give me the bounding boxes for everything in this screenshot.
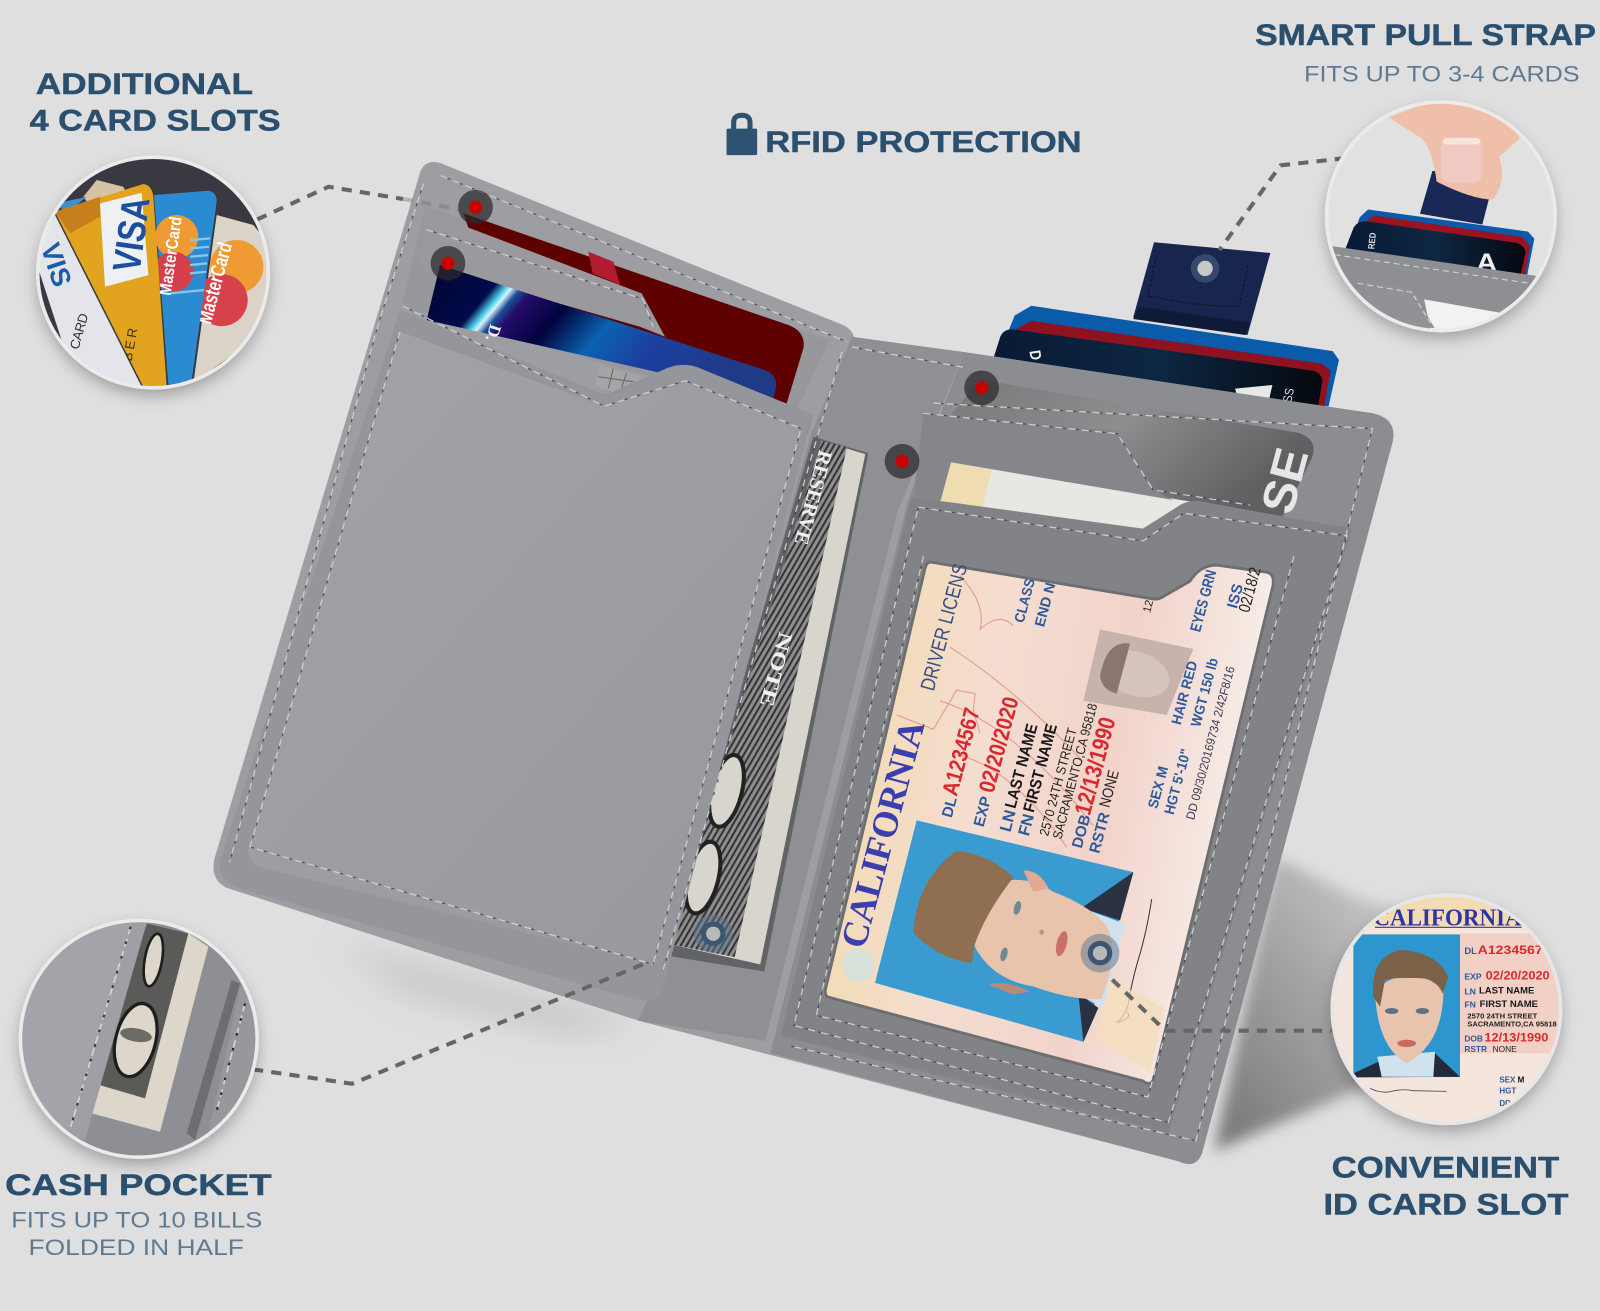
ID card window: [825, 562, 1273, 1083]
silver card: [923, 380, 1318, 520]
heading: convenient ID card slot: [1323, 1152, 1568, 1221]
connector: cash pocket: [253, 964, 643, 1084]
circle: ID card: LAST NAME: [1479, 985, 1534, 995]
ID card text: HAIR RED: [1169, 659, 1201, 727]
heading: cash pocket: CASH POCKET: [5, 1169, 271, 1202]
white visa card: VIS: [35, 239, 78, 290]
heading: convenient ID card slot: ID CARD SLOT: [1323, 1188, 1568, 1221]
circle: ID card: FIRST NAME: [1480, 999, 1538, 1009]
white card: [939, 462, 1194, 536]
pocket inner leather: [249, 332, 801, 964]
hotspot: card slot 2: [431, 246, 465, 281]
hotspot: card slot 1: [458, 190, 493, 225]
left panel card slots: [400, 207, 830, 437]
heading: cash pocket: FOLDED IN HALF: [29, 1235, 244, 1260]
circle: ID card: 2570 24TH STREET: [1467, 1014, 1538, 1021]
connector: card slots: [257, 187, 459, 219]
heading: cash pocket: [5, 1169, 271, 1260]
ID card text: EYES GRN: [1187, 568, 1220, 634]
blue card: D.: [482, 322, 505, 344]
front pocket flap band: [400, 310, 813, 437]
circle: ID card: NONE: [1493, 1044, 1517, 1054]
connector: ID slot: [1112, 980, 1332, 1031]
ID card text: LAST NAME: [1002, 722, 1042, 810]
hotspot: card slot 3: [964, 370, 999, 405]
ID card text: 2570 24TH STREET: [1036, 726, 1080, 838]
circle: ID card: SACRAMENTO,CA 95818: [1467, 1022, 1557, 1029]
ID card text: NONE: [1097, 768, 1123, 809]
ID card text: 12/13/1990: [1070, 714, 1121, 818]
ID card text: 12: [1141, 599, 1156, 614]
beige mastercard: MasterCard: [193, 240, 237, 326]
white visa card: [40, 215, 141, 386]
ID card text: CALIFORNIA: [832, 715, 933, 952]
heading: smart pull strap: FITS UP TO 3-4 CARDS: [1304, 62, 1580, 87]
ID card text: CLASS: [1012, 577, 1039, 625]
ID card text: FN: [1015, 812, 1038, 838]
blue card: [427, 265, 776, 398]
circle: ID card: A1234567: [1478, 943, 1543, 957]
circle: pull strap: A: [1476, 248, 1497, 276]
ID card text: EXP: [971, 795, 995, 829]
heading: RFID protection: [727, 115, 1082, 159]
portrait: [1353, 934, 1460, 1077]
heading: smart pull strap: [1255, 19, 1596, 87]
circle: ID card: 12/13/1990: [1484, 1030, 1549, 1044]
circle: credit cards: [33, 153, 277, 397]
hotspot: ID: [1081, 934, 1119, 972]
heading: additional 4 card slots: 4 CARD SLOTS: [30, 105, 281, 138]
wallet body: [213, 162, 1393, 1164]
banknote: NOTE: [755, 629, 796, 709]
ID card text: [832, 561, 1265, 952]
yellow visa card: [55, 184, 167, 387]
yellow visa card: BER: [120, 327, 140, 362]
heading: additional 4 card slots: ADDITIONAL: [36, 68, 253, 101]
circle: ID card: DOB: [1464, 1033, 1483, 1043]
heading: cash pocket: FITS UP TO 10 BILLS: [11, 1208, 262, 1233]
blue mastercard: MasterCard: [155, 215, 186, 297]
banknote detail: [92, 923, 208, 1132]
banknote: [668, 441, 865, 964]
wallet stitching: [230, 176, 1372, 1141]
ID card text: 02/20/2020: [974, 694, 1024, 795]
ID card text: HGT 5'-10": [1162, 747, 1195, 816]
ID card text: ISS: [1224, 582, 1247, 610]
heading: convenient ID card slot: CONVENIENT: [1332, 1152, 1559, 1185]
ID portrait: [875, 820, 1133, 1042]
ID card text: A1234567: [937, 705, 985, 798]
banknote: RESERVE: [789, 448, 836, 547]
hotspot: card slot 4: [885, 444, 919, 479]
heading: smart pull strap: SMART PULL STRAP: [1255, 19, 1596, 52]
hotspot: strap: [1191, 254, 1219, 283]
ID card text: DD 09/30/20169734 2/42F8/16: [1183, 665, 1238, 821]
circle: ID card: DL: [1464, 946, 1477, 956]
ID card text: 02/18/2: [1235, 565, 1265, 614]
pull strap and card stack: [994, 242, 1339, 406]
circle: ID card: DD: [1499, 1099, 1511, 1108]
silver card: SE: [1251, 442, 1318, 519]
circle: pull strap: RED: [1366, 232, 1378, 250]
ID blank corner tint: [1095, 979, 1165, 1072]
pull strap and card stack: SS: [1281, 387, 1297, 403]
circle: ID card: EXP: [1464, 971, 1482, 981]
ID seal: [842, 948, 874, 982]
circle: ID card: RSTR: [1464, 1044, 1487, 1054]
heading: additional 4 card slots: [30, 68, 281, 138]
circle: ID card: FN: [1464, 999, 1476, 1009]
pull strap and card stack: D: [1025, 349, 1044, 361]
connector: pull strap: [1219, 158, 1345, 250]
heading: RFID protection: RFID PROTECTION: [765, 126, 1082, 159]
ID card text: WGT 150 lb: [1188, 656, 1222, 729]
slot recess: [402, 207, 830, 417]
circle: ID card: LN: [1464, 986, 1476, 996]
circle: ID card: 02/20/2020: [1486, 968, 1550, 982]
circle: ID card: [1330, 893, 1563, 1127]
circle: ID card: HGT: [1499, 1086, 1516, 1095]
ID frame: [781, 497, 1352, 1133]
left front pocket: [220, 310, 810, 1000]
ID card text: END N: [1032, 581, 1059, 629]
circle: cash pocket: [17, 917, 273, 1163]
hotspot: cash: [694, 914, 733, 953]
beige mastercard: [194, 215, 267, 378]
ID signature: [1117, 899, 1152, 1022]
circle: pull strap: [1327, 100, 1555, 356]
ID card text: DL: [939, 795, 961, 819]
ID card text: SEX M: [1146, 765, 1172, 810]
spine and cash slot: [638, 337, 964, 1041]
right panel: [770, 352, 1393, 1164]
blue mastercard: [153, 191, 217, 385]
ID map lines: [897, 576, 1093, 847]
wallet cast shadows: [337, 857, 1449, 1151]
circle: ID card: SEX M: [1499, 1076, 1525, 1085]
white visa card: CARD: [67, 312, 91, 351]
middle flap: [913, 413, 1173, 500]
circle: ID card: CALIFORNIA: [1373, 905, 1522, 931]
ID card text: RSTR: [1086, 811, 1114, 855]
ID card text: SACRAMENTO,CA 95818: [1050, 702, 1100, 841]
ID card text: FIRST NAME: [1020, 722, 1061, 814]
ID card text: DOB: [1069, 813, 1094, 850]
ID ghost portrait: [1083, 629, 1193, 715]
yellow visa card: VISA: [105, 194, 159, 275]
upper card flap: [420, 212, 665, 337]
ID card text: LN: [997, 808, 1020, 834]
ID card text: DRIVER LICENS: [917, 561, 972, 693]
red card: [463, 213, 804, 403]
